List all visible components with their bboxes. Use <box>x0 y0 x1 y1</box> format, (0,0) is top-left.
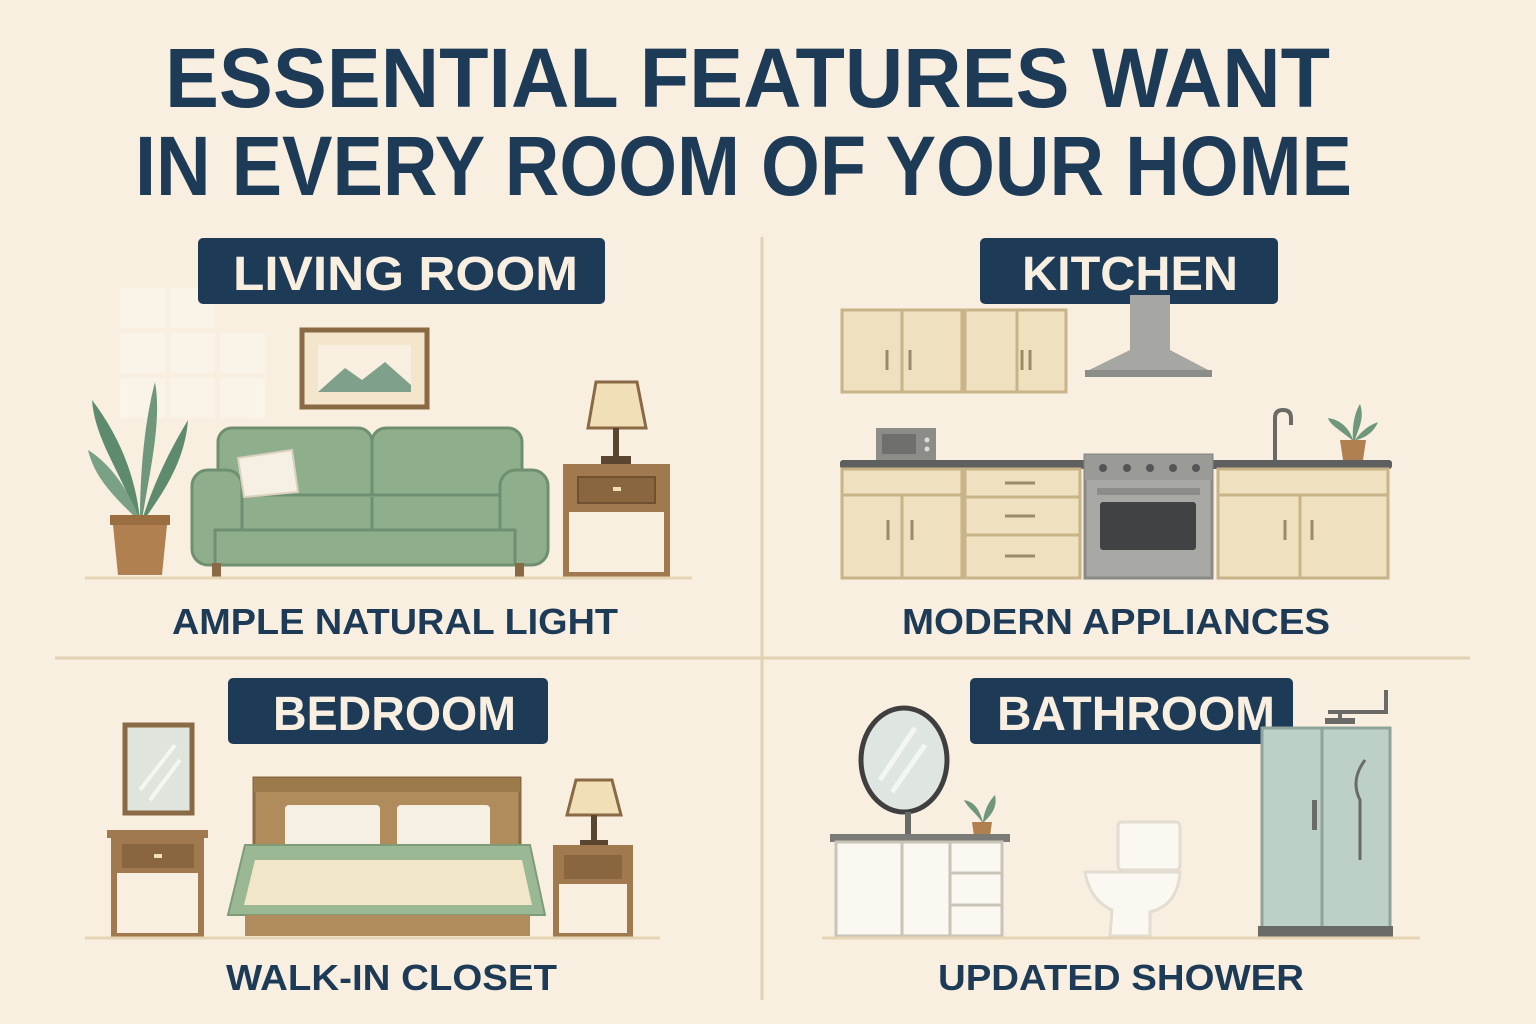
label: bedroom <box>228 678 548 744</box>
icon: plant <box>88 382 188 575</box>
window light <box>120 288 265 418</box>
caption: modern appliances: MODERN APPLIANCES <box>902 601 1330 642</box>
caption: ample natural light: AMPLE NATURAL LIGHT <box>172 601 618 642</box>
panel: bathroom <box>822 678 1420 998</box>
icon: upper cabinets <box>842 310 1066 392</box>
icon: vanity with plant <box>830 795 1010 936</box>
panel: kitchen <box>840 238 1392 642</box>
icon: right nightstand and lamp <box>556 780 630 936</box>
title <box>135 31 1352 213</box>
icon: wall mirror <box>125 725 192 813</box>
label: kitchen <box>980 238 1278 304</box>
title: IN EVERY ROOM OF YOUR HOME <box>135 119 1352 213</box>
icon: countertop and lower cabinets <box>840 460 1392 578</box>
label: bedroom: BEDROOM <box>273 688 516 741</box>
icon: faucet and plant <box>1275 404 1378 460</box>
panel: living room <box>85 238 692 642</box>
panel: bedroom <box>85 678 660 998</box>
icon: side table and lamp <box>566 382 667 575</box>
caption: updated shower: UPDATED SHOWER <box>938 957 1304 998</box>
icon: shower <box>1258 690 1393 938</box>
icon: range hood <box>1085 295 1212 377</box>
label: kitchen: KITCHEN <box>1022 248 1238 301</box>
icon: bed <box>228 778 545 936</box>
icon: picture frame <box>302 330 427 407</box>
caption: walk-in closet: WALK-IN CLOSET <box>226 957 557 998</box>
icon: microwave <box>876 428 936 460</box>
title: ESSENTIAL FEATURES WANT <box>165 31 1330 125</box>
label: living room <box>198 238 605 304</box>
icon: toilet <box>1085 822 1180 936</box>
icon: left nightstand <box>107 830 208 936</box>
icon: sofa <box>192 428 548 577</box>
label: living room: LIVING ROOM <box>233 248 578 301</box>
label: bathroom: BATHROOM <box>997 688 1275 741</box>
label: bathroom <box>970 678 1293 744</box>
icon: round mirror <box>861 708 947 812</box>
icon: stove <box>1085 455 1212 578</box>
